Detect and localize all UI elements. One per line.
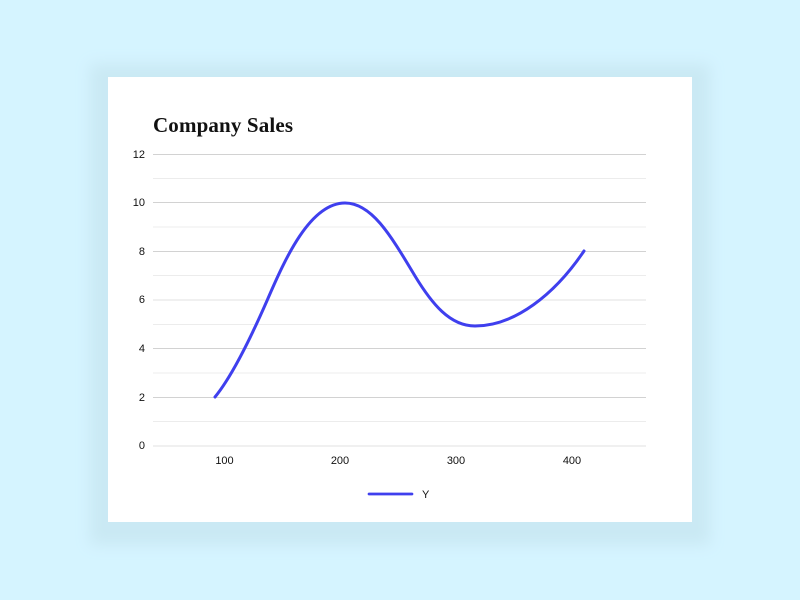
chart title: Company Sales <box>153 113 293 137</box>
y axis labels: 8 <box>139 246 145 258</box>
x axis labels <box>215 455 581 467</box>
x axis labels: 200 <box>331 455 349 467</box>
panel: chart card <box>108 77 692 522</box>
x axis labels: 400 <box>563 455 581 467</box>
y axis labels: 2 <box>139 392 145 404</box>
y axis labels: 6 <box>139 294 145 306</box>
legend <box>369 489 430 501</box>
y axis labels: 0 <box>139 440 145 452</box>
x axis labels: 100 <box>215 455 234 467</box>
y axis labels <box>133 149 145 452</box>
y axis labels: 10 <box>133 197 145 209</box>
legend: Y <box>422 489 430 501</box>
y axis labels: 12 <box>133 149 145 161</box>
data line: Y series <box>215 203 584 397</box>
y axis labels: 4 <box>139 343 145 355</box>
x axis labels: 300 <box>447 455 465 467</box>
